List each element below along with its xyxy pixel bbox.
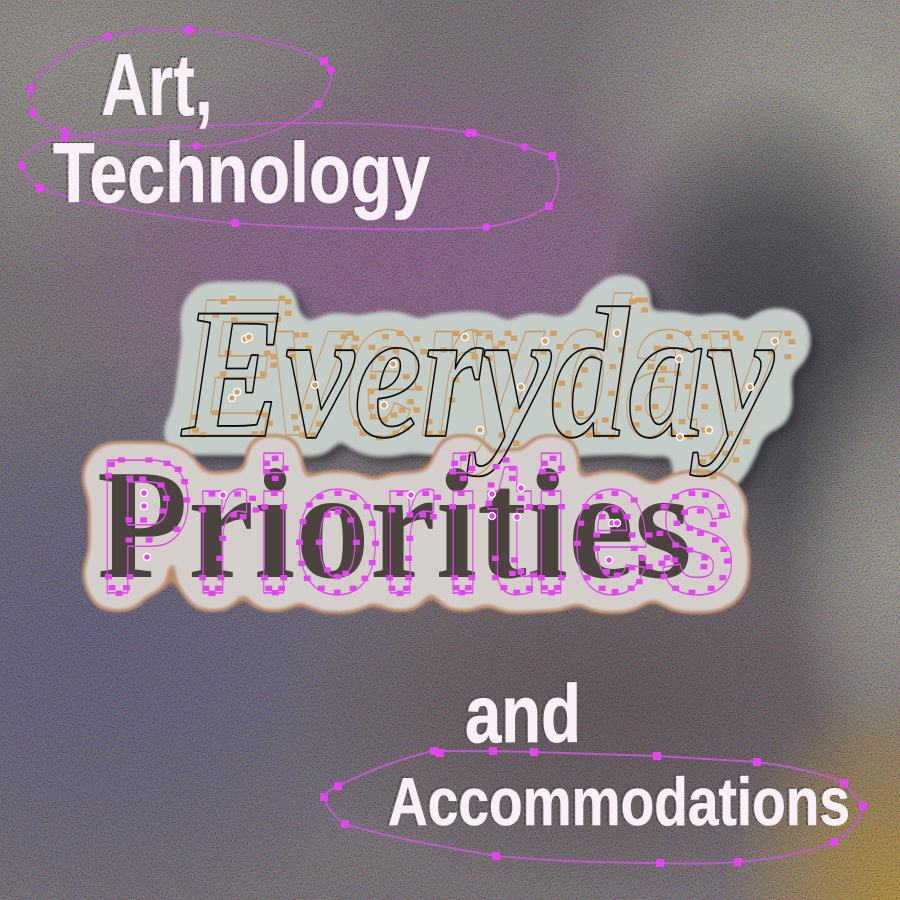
sticker backgrounds: Priorities: [97, 437, 692, 611]
sticker backgrounds: Priorities: [98, 418, 737, 634]
text: Technology: Technology: [53, 126, 430, 220]
bezier anchor nodes: Everyday: [195, 298, 792, 477]
target handles: Priorities: [140, 484, 620, 564]
sticker backgrounds: [97, 258, 792, 634]
text: Technology: Technology: [51, 125, 428, 219]
heading word: Priorities: [97, 418, 737, 634]
sticker backgrounds: Everyday: [180, 270, 775, 477]
heading word: Everyday: [180, 258, 792, 477]
nodes: Art ellipse: [27, 25, 335, 150]
ghost outline: Everyday: Everyday: [186, 258, 783, 477]
target handles: Everyday: [228, 330, 778, 440]
text: and: and: [465, 669, 581, 760]
text: Art,: Art,: [101, 35, 213, 134]
text: Art,: Art,: [99, 34, 211, 133]
nodes: Technology ellipse: [18, 129, 556, 231]
outlined text: Everyday: Everyday: [180, 270, 775, 477]
sticker backgrounds: Everyday: [186, 258, 783, 477]
solid text: Priorities: Priorities: [97, 437, 692, 611]
text: and: and: [463, 668, 579, 759]
ghost outline: Priorities: Priorities: [98, 418, 737, 634]
bezier anchor nodes: Priorities: [109, 458, 727, 593]
nodes: Accommodations ellipse: [320, 747, 867, 867]
ellipse outline: Technology: [18, 123, 558, 231]
ellipse outline: Art: [27, 25, 335, 150]
ellipse outline: Accommodations: [320, 747, 867, 867]
